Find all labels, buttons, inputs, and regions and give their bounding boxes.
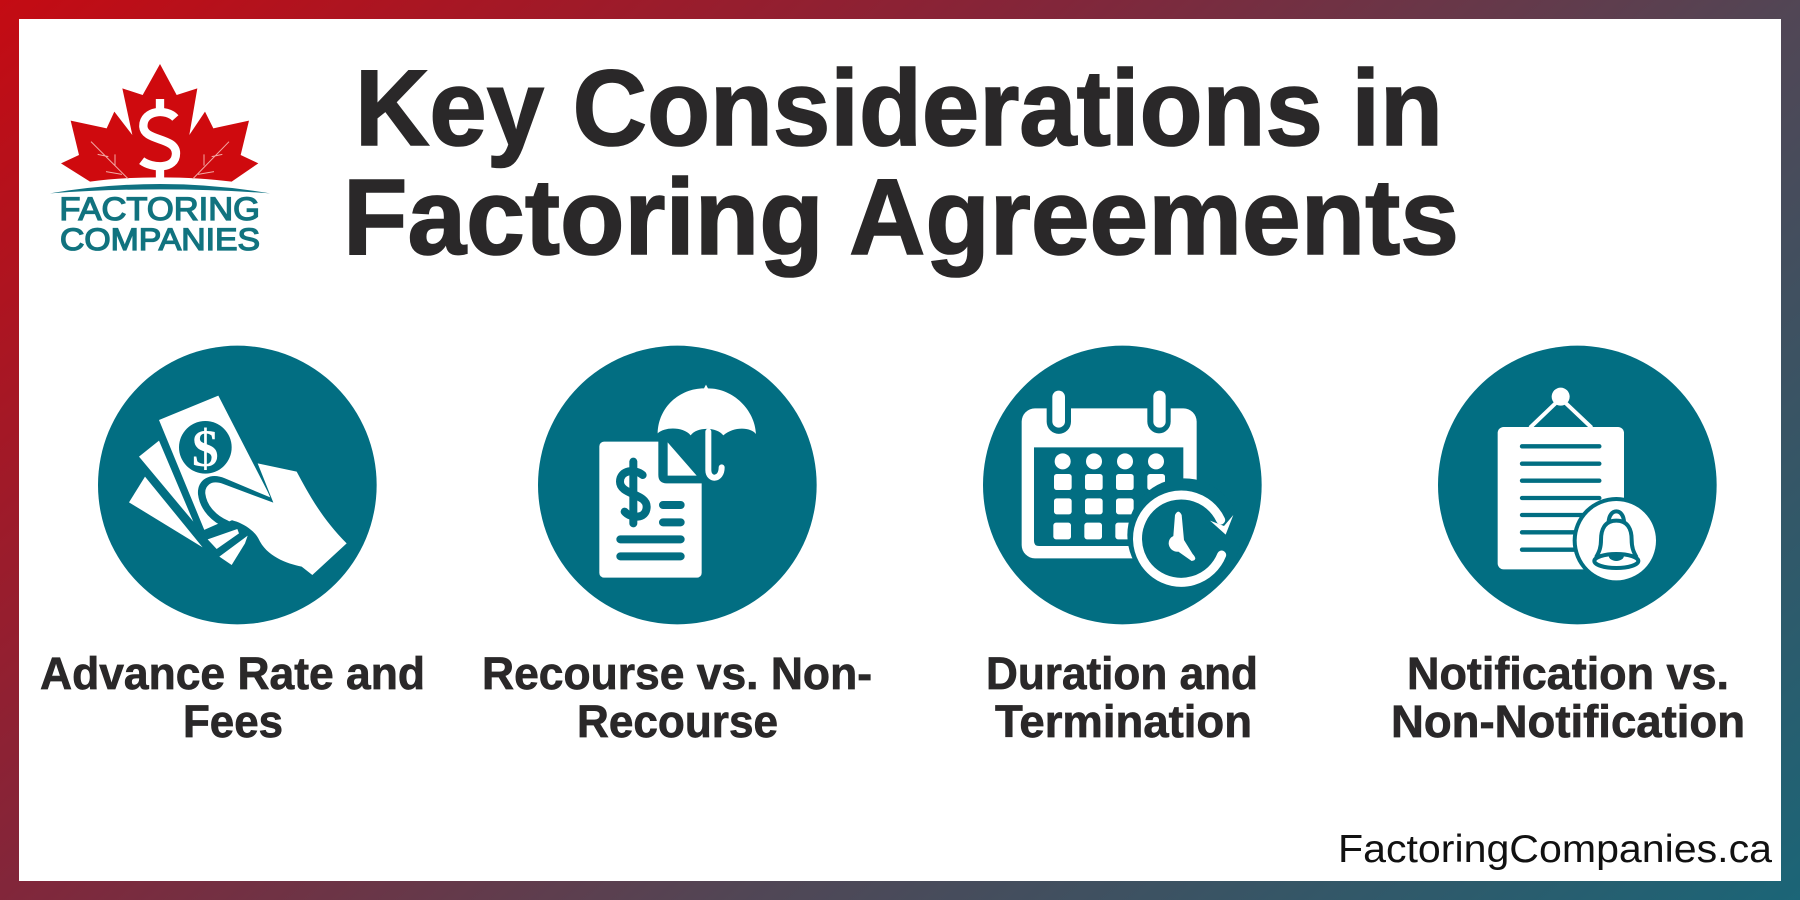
panel: advance rate and fees [40, 346, 425, 747]
logo wordmark line 2: COMPANIES [60, 222, 260, 257]
label: Duration and Termination: Duration and [986, 648, 1258, 699]
label: Notification vs. Non-Notification: Non-Notification [1391, 696, 1745, 747]
label: Recourse vs. Non-Recourse: Recourse vs. Non- [482, 648, 872, 699]
logo swoosh [50, 184, 270, 193]
icon: hand holding money: $ [192, 418, 219, 478]
icon: hanging notice with bell [1438, 346, 1717, 624]
label: Notification vs. Non-Notification [1391, 648, 1745, 747]
label: Recourse vs. Non-Recourse [482, 648, 872, 747]
label: Notification vs. Non-Notification: Notification vs. [1407, 648, 1729, 699]
label: Recourse vs. Non-Recourse: Recourse [577, 696, 778, 747]
icon: hand holding money [98, 346, 377, 624]
label: Duration and Termination [986, 648, 1258, 747]
logo: Factoring Companies maple leaf [50, 64, 270, 257]
icon: dollar sign [142, 99, 176, 179]
icon: invoice with umbrella [538, 346, 817, 624]
leaf veins [91, 142, 229, 179]
logo wordmark line 1: FACTORING [59, 190, 260, 227]
title line 1: Key Considerations in [355, 47, 1443, 168]
icon: calendar with clock [983, 346, 1262, 624]
footer URL: FactoringCompanies.ca [1338, 828, 1772, 871]
label: Advance Rate and Fees: Advance Rate and [40, 648, 425, 699]
panel: notification vs non-notification [1391, 346, 1745, 747]
panel: recourse vs non-recourse [482, 346, 872, 747]
panel: duration and termination [983, 346, 1262, 747]
icon: red maple leaf [61, 64, 258, 182]
title line 2: Factoring Agreements [343, 156, 1459, 277]
label: Advance Rate and Fees [40, 648, 425, 747]
title [343, 47, 1459, 277]
label: Advance Rate and Fees: Fees [183, 696, 283, 747]
label: Duration and Termination: Termination [995, 696, 1252, 747]
